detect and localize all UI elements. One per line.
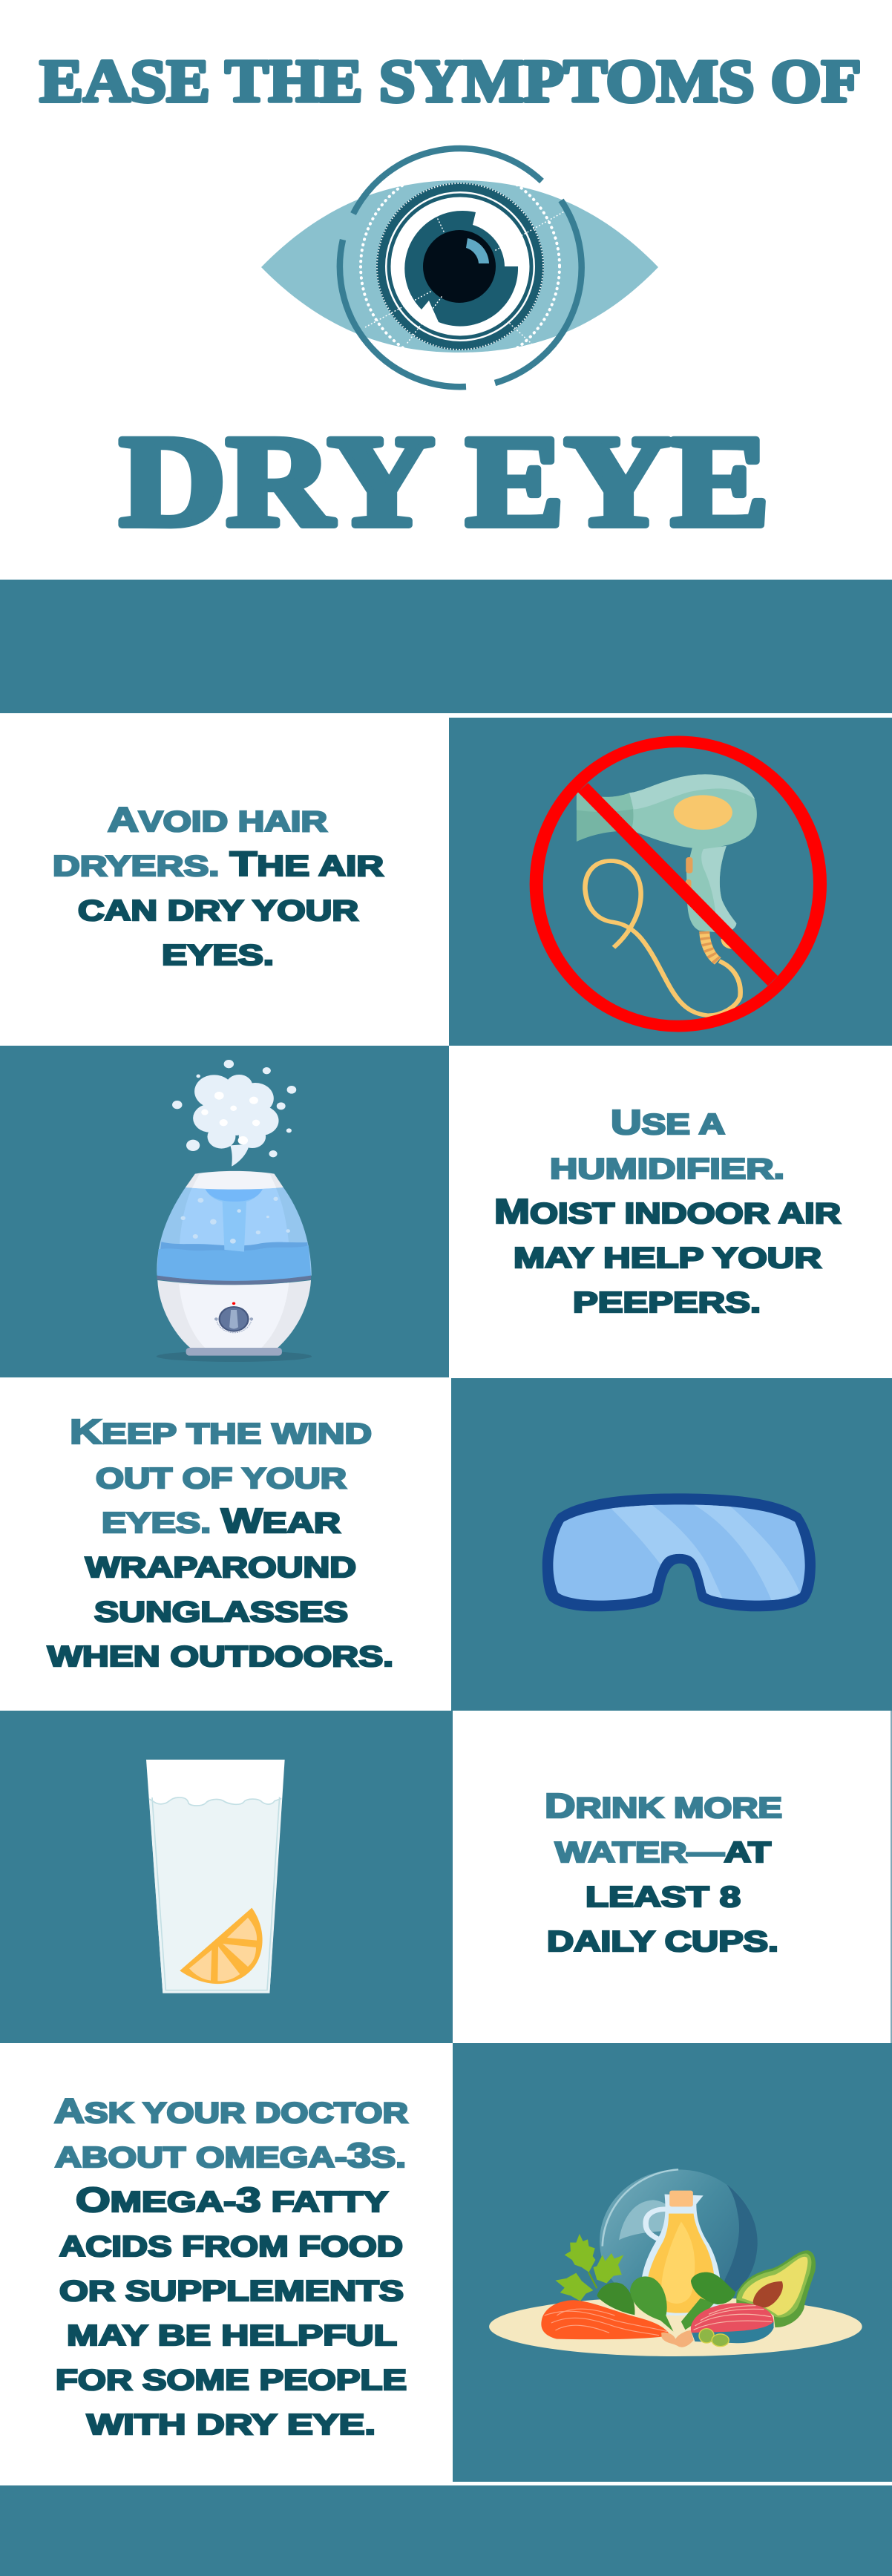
icon: humidifier with steam bbox=[157, 1060, 312, 1362]
text line: WRAPAROUND bbox=[85, 1552, 356, 1584]
panel: use a humidifier text: USE A bbox=[611, 1103, 725, 1141]
text line: DRYERS. THE AIR bbox=[53, 845, 384, 883]
icon: stylised eye bbox=[261, 148, 658, 387]
icon: crossed-out hair dryer bbox=[537, 741, 820, 1026]
text line: WHEN OUTDOORS. bbox=[47, 1641, 393, 1673]
text line: FOR SOME PEOPLE bbox=[56, 2364, 407, 2396]
panel: wind text: K EEP THE WIND bbox=[70, 1412, 372, 1451]
text line: WATER— AT bbox=[555, 1837, 771, 1869]
text line: OUT OF YOUR bbox=[96, 1463, 347, 1495]
bottom band bbox=[0, 2485, 892, 2576]
text line: ABOUT OMEGA- 3S. bbox=[55, 2136, 406, 2174]
text line: MOIST INDOOR AIR bbox=[494, 1192, 841, 1230]
text line: PEEPERS. bbox=[573, 1287, 761, 1319]
text line: DAILY CUPS. bbox=[547, 1926, 778, 1958]
icon: water glass with orange slice bbox=[146, 1760, 285, 1993]
text line: EYES. bbox=[162, 940, 274, 971]
text line: O MEGA- 3 FATTY bbox=[76, 2180, 388, 2219]
icon: plate of healthy foods with oil jug bbox=[489, 2169, 862, 2356]
text line: MAY HELP YOUR bbox=[514, 1242, 822, 1274]
panel: glass of water bbox=[0, 1711, 453, 2043]
text line: HUMIDIFIER. bbox=[550, 1153, 784, 1185]
title: dry eye: DRY EYE bbox=[119, 410, 770, 554]
panel: omega-3 foods bbox=[453, 2043, 892, 2482]
header band bbox=[0, 580, 892, 713]
text line: MAY BE HELPFUL bbox=[67, 2320, 397, 2352]
text line: EYES. W EAR bbox=[102, 1501, 341, 1540]
text line: SUNGLASSES bbox=[94, 1596, 348, 1628]
text line: ACIDS FROM FOOD bbox=[59, 2231, 403, 2263]
title: ease the symptoms of: EASE THE SYMPTOMS OF bbox=[40, 47, 861, 114]
text line: OR SUPPLEMENTS bbox=[59, 2275, 404, 2307]
panel: drink more water text: DRINK MORE bbox=[545, 1786, 782, 1825]
panel: avoid hair dryers text: AVOID HAIR bbox=[108, 800, 327, 839]
panel: humidifier bbox=[0, 1046, 449, 1377]
text line: WITH DRY EYE. bbox=[87, 2409, 376, 2441]
panel: goggles bbox=[451, 1378, 892, 1711]
right edge line bbox=[891, 1711, 892, 2043]
text line: LEAST 8 bbox=[586, 1881, 741, 1913]
panel: hair dryer bbox=[449, 718, 892, 1046]
text line: CAN DRY YOUR bbox=[78, 895, 358, 927]
icon: wraparound sunglasses bbox=[542, 1493, 816, 1611]
panel: omega-3 text: ASK YOUR DOCTOR bbox=[54, 2091, 408, 2130]
